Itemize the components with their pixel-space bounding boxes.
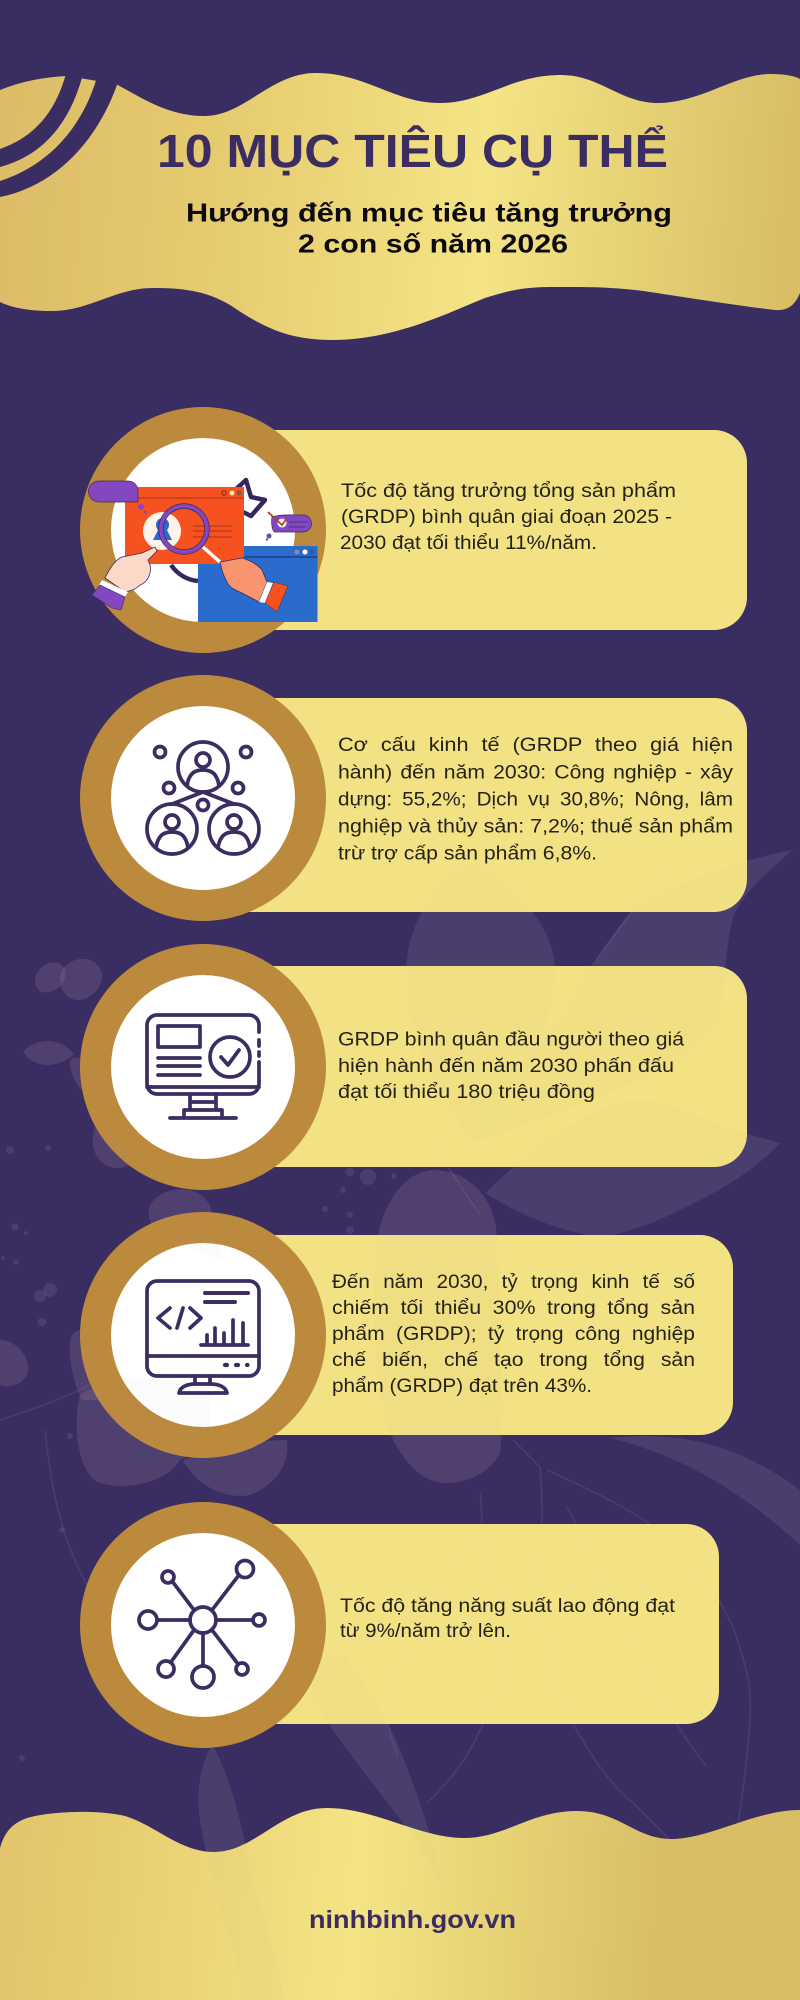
icon: monitor with check mark: [147, 1015, 259, 1118]
text: card 2: nghiệp và thủy sản: 7,2%; thuế sản phẩm: [338, 816, 733, 838]
faint leaf overlay over cards: [0, 850, 800, 2000]
icon: monitor with code and bars: [147, 1281, 259, 1393]
circle badge 3: [80, 944, 326, 1190]
text: card 1: Tốc độ tăng trưởng tổng sản phẩm: [341, 481, 676, 502]
icon: people network: [147, 742, 259, 854]
text: card 5: từ 9%/năm trở lên.: [340, 1621, 511, 1642]
card 4 background: [200, 1235, 733, 1435]
text: card 3: hiện hành đến năm 2030 phấn đấu: [338, 1056, 674, 1077]
card 5 background: [200, 1524, 719, 1724]
title: 10 MỤC TIÊU CỤ THỂ: [157, 125, 668, 177]
red window: [125, 487, 244, 564]
left hand: [92, 547, 157, 610]
subtitle: Hướng đến mục tiêu tăng trưởng: [186, 198, 672, 228]
text: card 2: hành) đến năm 2030: Công nghiệp - xây: [338, 762, 734, 784]
dark star behind windows: [235, 480, 265, 516]
header banner: [0, 70, 800, 340]
card 2 background: [200, 698, 747, 912]
circle badge 5: [80, 1502, 326, 1748]
background leaves and flowers: [0, 850, 800, 2000]
text: card 2: Cơ cấu kinh tế (GRDP theo giá hiện: [338, 735, 733, 756]
card 3 background: [200, 966, 747, 1167]
left speech bubble: [88, 481, 146, 514]
text: card 1: 2030 đạt tối thiểu 11%/năm.: [340, 533, 597, 554]
text: card 1: (GRDP) bình quân giai đoạn 2025 -: [341, 507, 672, 528]
subtitle: 2 con số năm 2026: [298, 228, 568, 258]
text: card 4: [332, 1272, 695, 1397]
icon: magnifier over browser windows: [88, 480, 318, 622]
text: card 4: phẩm (GRDP); tỷ trọng công nghiệp: [332, 1324, 695, 1345]
text: card 4: Đến năm 2030, tỷ trọng kinh tế số: [332, 1272, 695, 1293]
text: card 3: đạt tối thiểu 180 triệu đồng: [338, 1082, 595, 1103]
footer banner: [0, 1808, 800, 2000]
text: card 1: [340, 481, 676, 554]
text: card 3: [338, 1030, 684, 1103]
text: card 4: chiếm tối thiểu 30% trong tổng sản: [332, 1298, 695, 1319]
text: card 2: trừ trợ cấp sản phẩm 6,8%.: [338, 844, 597, 864]
text: card 2: [338, 735, 734, 864]
circle badge 4: [80, 1212, 326, 1458]
text: card 5: Tốc độ tăng năng suất lao động đạt: [340, 1596, 676, 1617]
icon: hub and nodes: [139, 1560, 265, 1688]
text: card 4: phẩm (GRDP) đạt trên 43%.: [332, 1376, 592, 1397]
circle badge 1: [80, 407, 326, 653]
text: card 3: GRDP bình quân đầu người theo giá: [338, 1030, 684, 1050]
right hand: [220, 558, 288, 612]
circle badge 2: [80, 675, 326, 921]
text: card 5: [340, 1596, 676, 1642]
footer website: ninhbinh.gov.vn: [309, 1906, 516, 1934]
subtitle: [186, 198, 672, 258]
text: card 2: dựng: 55,2%; Dịch vụ 30,8%; Nông, lâm: [338, 790, 733, 810]
right speech bubble: [266, 512, 312, 541]
text: card 4: chế biến, chế tạo trong tổng sản: [332, 1350, 695, 1371]
blue window: [198, 546, 318, 622]
card 1 background: [200, 430, 747, 630]
magnifier: [159, 504, 220, 562]
